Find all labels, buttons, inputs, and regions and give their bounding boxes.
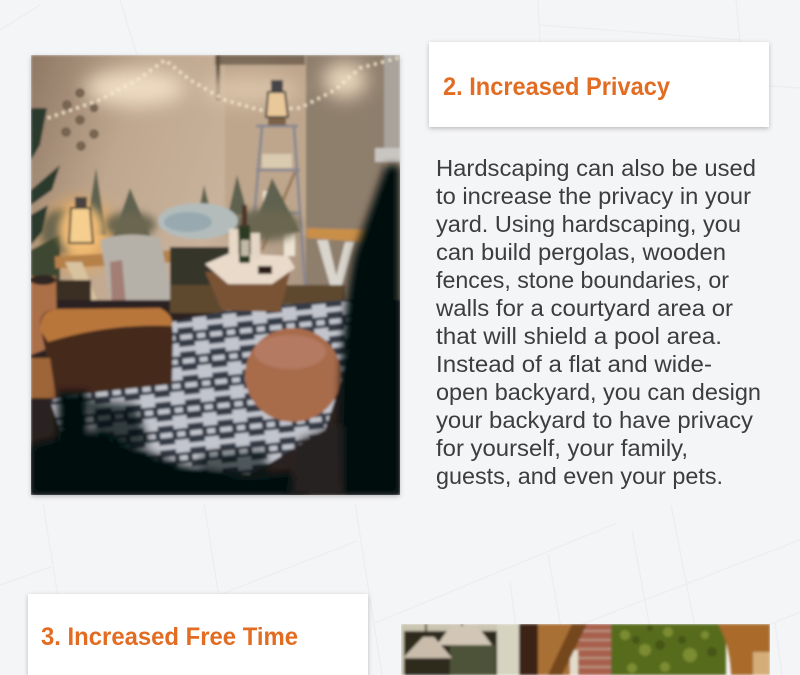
rug <box>50 300 365 475</box>
string lights <box>48 58 398 118</box>
body text block: open backyard, you can design <box>436 379 761 405</box>
body text block: to increase the privacy in your <box>436 183 751 209</box>
photo: patio with lanterns and rug <box>30 55 400 495</box>
lantern on bench <box>59 204 103 256</box>
body text block: Instead of a flat and wide- <box>436 351 712 377</box>
body text block: yard. Using hardscaping, you <box>436 211 741 237</box>
body text block <box>435 155 761 489</box>
body text block: fences, stone boundaries, or <box>436 267 729 293</box>
pillow <box>158 203 238 239</box>
ladder stand with lantern <box>250 126 306 300</box>
floor <box>31 300 400 495</box>
body text block: for yourself, your family, <box>436 435 688 461</box>
body text block: your backyard to have privacy <box>436 407 753 433</box>
body text block: that will shield a pool area. <box>436 323 722 349</box>
dark foreground foliage <box>31 165 400 495</box>
bench <box>55 249 190 268</box>
wine and candles <box>239 225 250 263</box>
photo: covered patio with pendant lamps <box>401 624 770 675</box>
body text block: Hardscaping can also be used <box>436 155 756 181</box>
blanket <box>100 234 173 307</box>
left ottoman <box>40 308 173 397</box>
basket <box>31 276 57 355</box>
wall <box>29 54 401 302</box>
leather pouf <box>245 328 341 422</box>
coffee table <box>205 272 290 312</box>
wall glow <box>42 62 367 270</box>
body text block: can build pergolas, wooden <box>436 239 726 265</box>
heading card: 2. Increased Privacy <box>429 42 769 127</box>
body text block: guests, and even your pets. <box>436 463 723 489</box>
heading card: 3. Increased Free Time <box>28 594 368 675</box>
plants <box>85 168 300 240</box>
wall discs <box>62 89 98 150</box>
wooden side table <box>307 228 378 243</box>
body text block: walls for a courtyard area or <box>435 295 733 321</box>
heading text: 2. Increased Privacy <box>443 73 670 101</box>
heading text: 3. Increased Free Time <box>41 623 298 651</box>
